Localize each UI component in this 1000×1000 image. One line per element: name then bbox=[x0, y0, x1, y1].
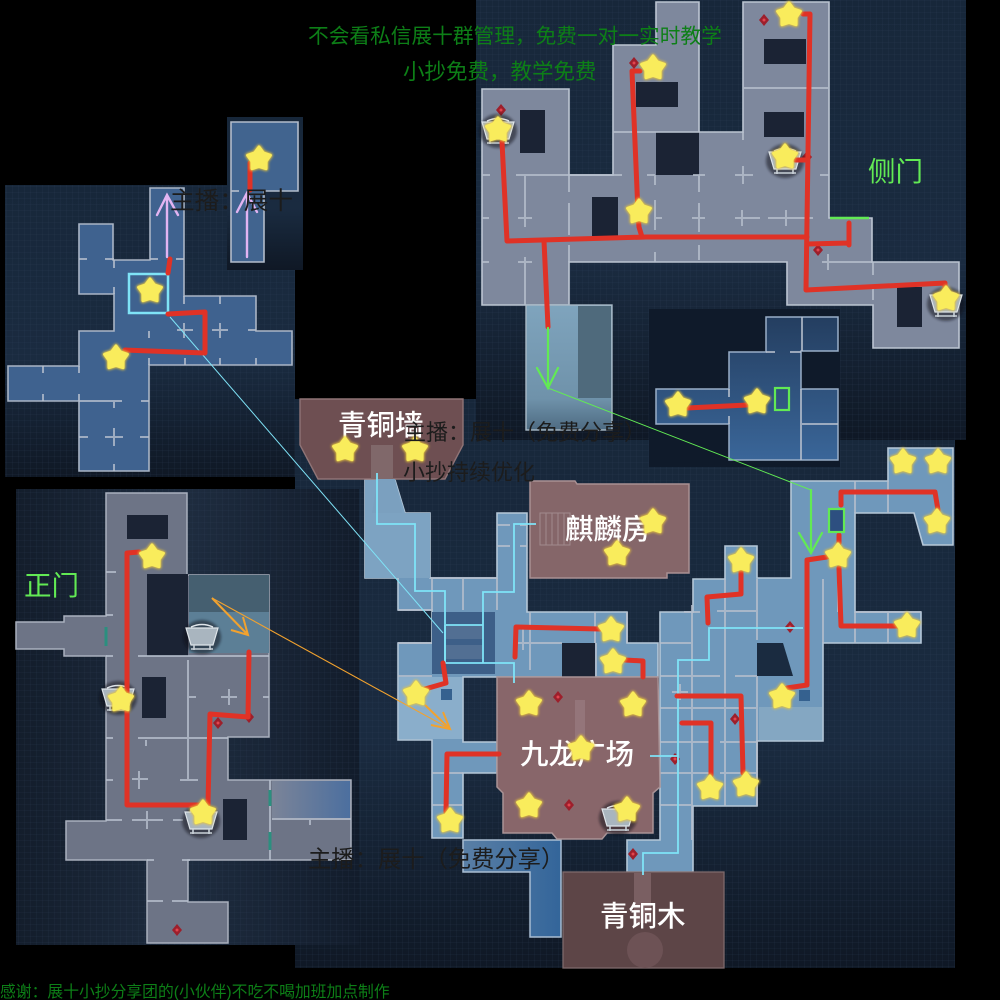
rooms: center-left light-blue corridors bbox=[365, 480, 658, 838]
treasure chests bbox=[99, 114, 965, 838]
red route lines bbox=[125, 14, 945, 812]
streamer credit: center: 主播：展十（免费分享） bbox=[404, 420, 646, 445]
room: bronze wood bbox=[563, 872, 724, 968]
streamer credit: bottom: 主播：展十（免费分享） bbox=[308, 846, 564, 872]
label: nine dragon plaza: 九龙广场 bbox=[520, 739, 634, 771]
label: qilin room: 麒麟房 bbox=[565, 514, 651, 546]
label: side gate: 侧门 bbox=[868, 156, 923, 187]
panel: bottom-left main gate map bbox=[16, 489, 359, 945]
room: blue upper-middle map bbox=[649, 309, 840, 467]
cyan guide lines bbox=[129, 274, 803, 875]
panel: center map backdrop bbox=[295, 399, 955, 968]
pink arrows bbox=[157, 193, 257, 257]
room: blue lower corridor bbox=[463, 840, 561, 937]
label: main gate: 正门 bbox=[24, 570, 79, 601]
streamer credit: top left: 主播：展十 bbox=[170, 187, 293, 215]
label: bronze wall: 青铜墙 bbox=[338, 410, 424, 442]
green arrows and markers bbox=[537, 218, 869, 553]
rooms: right light-blue section bbox=[627, 448, 953, 872]
panel: top-left small room bbox=[227, 117, 303, 270]
green notice line 1: 不会看私信展十群管理，免费一对一实时教学 bbox=[308, 25, 722, 48]
red diamond markers bbox=[172, 14, 823, 936]
room: bronze wall bbox=[300, 399, 463, 513]
label: bronze wood: 青铜木 bbox=[600, 901, 686, 933]
green notice line 2: 小抄免费，教学免费 bbox=[403, 60, 597, 84]
room: qilin room bbox=[530, 481, 689, 578]
yellow stars bbox=[105, 3, 957, 831]
panel: top-left blue map bbox=[5, 185, 295, 477]
panel: top-right side gate map bbox=[476, 0, 966, 440]
cheat-sheet note: 小抄持续优化 bbox=[403, 460, 535, 485]
orange arrows bbox=[212, 598, 450, 729]
room: nine dragon plaza bbox=[497, 677, 660, 839]
